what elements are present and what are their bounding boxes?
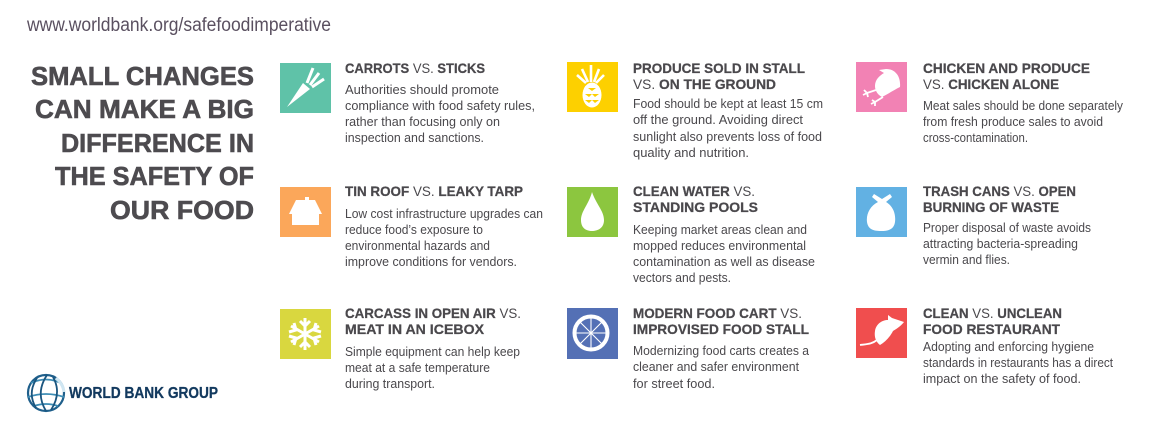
heading: MODERN FOOD CART VS. [633, 305, 802, 321]
panel: chicken and produce vs chicken alone: VS. CHICKEN ALONE [923, 76, 1059, 92]
website url: www.worldbank.org/safefoodimperative [26, 15, 331, 36]
title: SMALL CHANGES [31, 61, 254, 91]
body text: contamination as well as disease [633, 255, 815, 269]
heading: TIN ROOF VS. LEAKY TARP [345, 183, 523, 199]
body text: inspection and sanctions. [345, 131, 484, 145]
panel: clean vs unclean restaurant: FOOD RESTAURANT [923, 321, 1060, 337]
body text [633, 97, 823, 160]
body text: Food should be kept at least 15 cm [633, 97, 823, 111]
body text [345, 83, 535, 145]
body text: quality and nutrition. [633, 146, 749, 160]
title: THE SAFETY OF [55, 161, 254, 191]
panel: trash cans vs open burning: BURNING OF WASTE [923, 199, 1059, 215]
panel: clean water vs standing pools [567, 183, 815, 285]
body text: vectors and pests. [633, 271, 731, 285]
body text [923, 221, 1091, 267]
icon: trash bag [856, 187, 907, 237]
body text [923, 99, 1124, 145]
panel: produce in stall vs on ground [567, 60, 823, 160]
body text: mopped reduces environmental [633, 239, 806, 253]
icon: house [280, 187, 331, 237]
icon: carrot [280, 63, 331, 113]
body text: Low cost infrastructure upgrades can [345, 207, 543, 221]
body text: Authorities should promote [345, 83, 499, 97]
icon: rat [856, 308, 907, 358]
heading: PRODUCE SOLD IN STALL [633, 60, 805, 76]
heading: TRASH CANS VS. OPEN [923, 183, 1076, 199]
panel: carcass vs icebox [280, 305, 521, 391]
body text: reduce food’s exposure to [345, 223, 483, 237]
panel: clean vs unclean restaurant [856, 305, 1113, 386]
title: CAN MAKE A BIG [35, 94, 254, 124]
body text: Proper disposal of waste avoids [923, 221, 1091, 235]
body text: Keeping market areas clean and [633, 223, 807, 237]
body text: attracting bacteria-spreading [923, 237, 1078, 251]
body text: cross-contamination. [923, 131, 1028, 145]
panel: modern cart vs improvised stall [567, 305, 809, 391]
heading: CLEAN WATER VS. [633, 183, 755, 199]
panel: tin roof vs leaky tarp [280, 183, 543, 269]
title: DIFFERENCE IN [61, 128, 254, 158]
body text: standards in restaurants has a direct [923, 356, 1113, 370]
panel: produce in stall vs on ground: VS. ON THE GROUND [633, 76, 776, 92]
icon: pineapple [567, 62, 618, 112]
body text: compliance with food safety rules, [345, 99, 535, 113]
heading: CHICKEN AND PRODUCE [923, 60, 1090, 76]
body text [633, 223, 815, 285]
title: OUR FOOD [110, 195, 254, 225]
body text [633, 344, 809, 391]
heading: CARROTS VS. STICKS [345, 60, 485, 76]
panel: modern cart vs improvised stall: IMPROVISED FOOD STALL [633, 321, 809, 337]
body text [345, 207, 543, 269]
body text: from fresh produce sales to avoid [923, 115, 1103, 129]
icon: snowflake [280, 309, 331, 359]
body text: vermin and flies. [923, 253, 1010, 267]
panel: trash cans vs open burning [856, 183, 1091, 267]
icon: globe [28, 375, 64, 411]
panel: chicken and produce vs chicken alone [856, 60, 1124, 145]
panel: clean water vs standing pools: STANDING POOLS [633, 199, 758, 215]
body text: impact on the safety of food. [923, 372, 1081, 386]
body text [923, 340, 1113, 386]
body text: sunlight also prevents loss of food [633, 130, 822, 144]
icon: water drop [567, 187, 618, 237]
body text: during transport. [345, 377, 435, 391]
heading: CLEAN VS. UNCLEAN [923, 305, 1062, 321]
icon: wheel [567, 308, 618, 359]
panel: carrots vs sticks [280, 60, 535, 145]
body text: Adopting and enforcing hygiene [923, 340, 1094, 354]
body text: cleaner and safer environment [633, 360, 799, 374]
body text: Modernizing food carts creates a [633, 344, 809, 358]
title [31, 61, 254, 225]
body text: improve conditions for vendors. [345, 255, 517, 269]
body text: off the ground. Avoiding direct [633, 113, 804, 127]
body text: meat at a safe temperature [345, 361, 490, 375]
panel: carcass vs icebox: MEAT IN AN ICEBOX [345, 321, 485, 337]
logo wordmark: WORLD BANK GROUP [69, 385, 218, 402]
heading: CARCASS IN OPEN AIR VS. [345, 305, 521, 321]
body text: rather than focusing only on [345, 115, 500, 129]
body text: environmental hazards and [345, 239, 490, 253]
logo: World Bank Group [28, 375, 218, 411]
icon: chicken [856, 62, 907, 112]
body text [345, 345, 520, 391]
body text: for street food. [633, 377, 715, 391]
body text: Meat sales should be done separately [923, 99, 1124, 113]
body text: Simple equipment can help keep [345, 345, 520, 359]
